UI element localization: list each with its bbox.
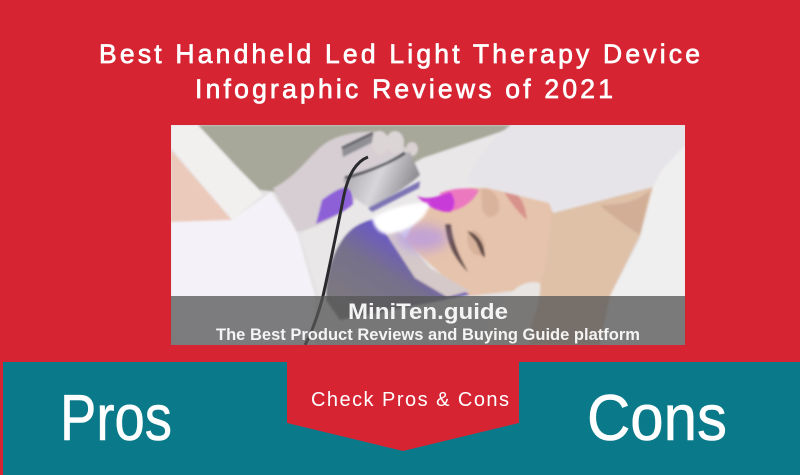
handheld device — [342, 131, 420, 212]
pros label: Pros — [60, 381, 172, 454]
title — [99, 39, 700, 104]
doctor collar — [171, 125, 263, 220]
lips — [504, 192, 528, 220]
teal band — [3, 362, 800, 475]
wall behind — [198, 125, 511, 192]
lower gloved hand — [514, 281, 542, 318]
black cable — [305, 157, 368, 345]
caption text — [216, 303, 639, 344]
led bristles — [368, 181, 420, 212]
dark band — [345, 153, 405, 178]
neck and chest skin — [530, 187, 653, 345]
nose — [481, 188, 499, 217]
white bed sheet — [325, 154, 468, 296]
hair net band — [385, 230, 470, 297]
doctor coat — [171, 192, 315, 296]
title: Best Handheld Led Light Therapy Device — [99, 39, 700, 69]
handle — [342, 133, 373, 157]
white robe — [600, 145, 685, 345]
towel over the shoulder — [489, 125, 652, 214]
cylinder body — [343, 152, 420, 207]
fingers — [371, 130, 388, 144]
red arrow banner — [287, 362, 519, 451]
doctor skin — [171, 150, 232, 222]
title: Infographic Reviews of 2021 — [195, 74, 613, 104]
caption bar — [171, 296, 685, 345]
violet glow on forehead — [396, 225, 448, 251]
photo: LED light therapy treatment — [171, 125, 685, 345]
banner text: Check Pros & Cons — [311, 389, 509, 411]
eyebrow — [445, 224, 468, 272]
cons label: Cons — [587, 381, 727, 454]
hair net — [326, 218, 470, 320]
face skin — [405, 188, 551, 296]
pink light on the cheek — [417, 188, 479, 212]
bright led glow — [372, 203, 428, 234]
caption text: The Best Product Reviews and Buying Guide platform — [216, 325, 640, 344]
caption text: MiniTen.guide — [348, 299, 508, 324]
eye socket shadow — [468, 230, 484, 256]
gloved hand — [273, 132, 410, 232]
closed eye — [467, 231, 485, 257]
